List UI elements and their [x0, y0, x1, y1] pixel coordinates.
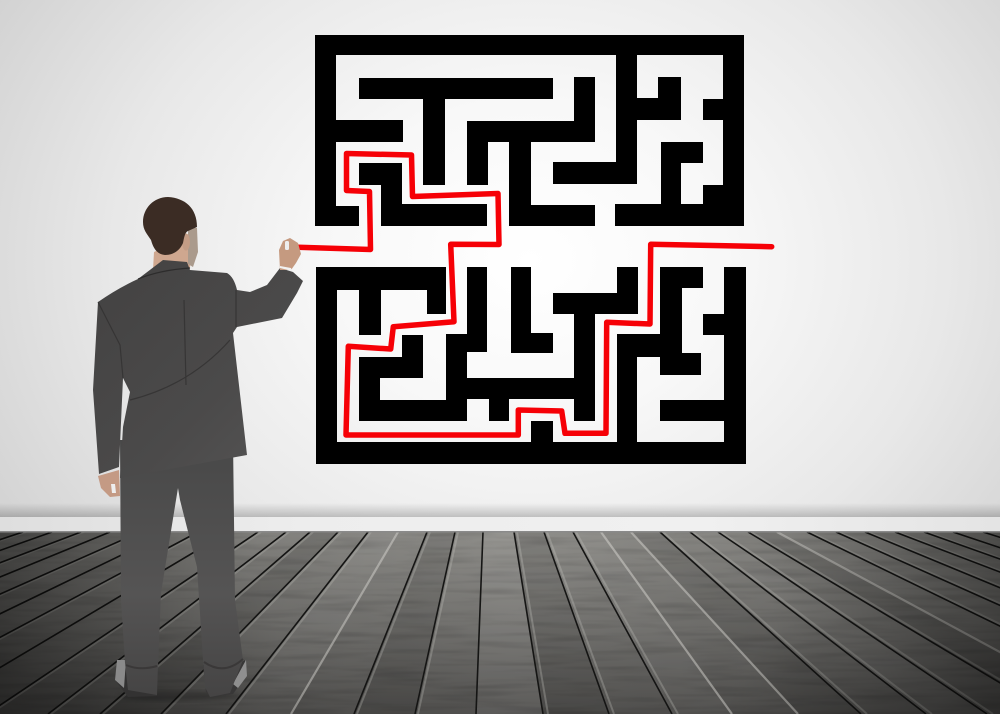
jacket collar: [138, 268, 190, 279]
plank highlight lines: [0, 532, 1000, 714]
baseboard: [0, 517, 1000, 532]
neck: [153, 240, 192, 270]
left shoe: [115, 664, 158, 697]
red solution line: [298, 154, 772, 435]
plank grooves: [0, 532, 1000, 714]
face: [188, 228, 198, 267]
wood grain: [0, 532, 1000, 714]
floor vignette: [0, 532, 1000, 714]
floor shadow under feet: [118, 691, 242, 701]
lower hand: [98, 470, 120, 497]
businessman: [93, 197, 303, 701]
ear: [182, 234, 190, 250]
right shoe: [203, 660, 246, 697]
maze: lower half: [316, 267, 746, 464]
shirt cuff: [280, 266, 292, 271]
trousers: [120, 440, 243, 697]
jacket folds: [98, 290, 236, 400]
marker: [285, 241, 289, 250]
trouser folds: [126, 659, 243, 668]
maze: upper half: [315, 35, 744, 226]
wall bottom shadow: [0, 503, 1000, 517]
wooden floor: [0, 532, 1000, 714]
plank tone variation: [100, 532, 1000, 714]
wall background: [0, 0, 1000, 518]
jacket: [93, 260, 303, 478]
light plank seams: [291, 532, 1000, 714]
hair: [143, 197, 197, 255]
drawing hand: [279, 238, 301, 270]
top edge of floor: [0, 531, 1000, 532]
